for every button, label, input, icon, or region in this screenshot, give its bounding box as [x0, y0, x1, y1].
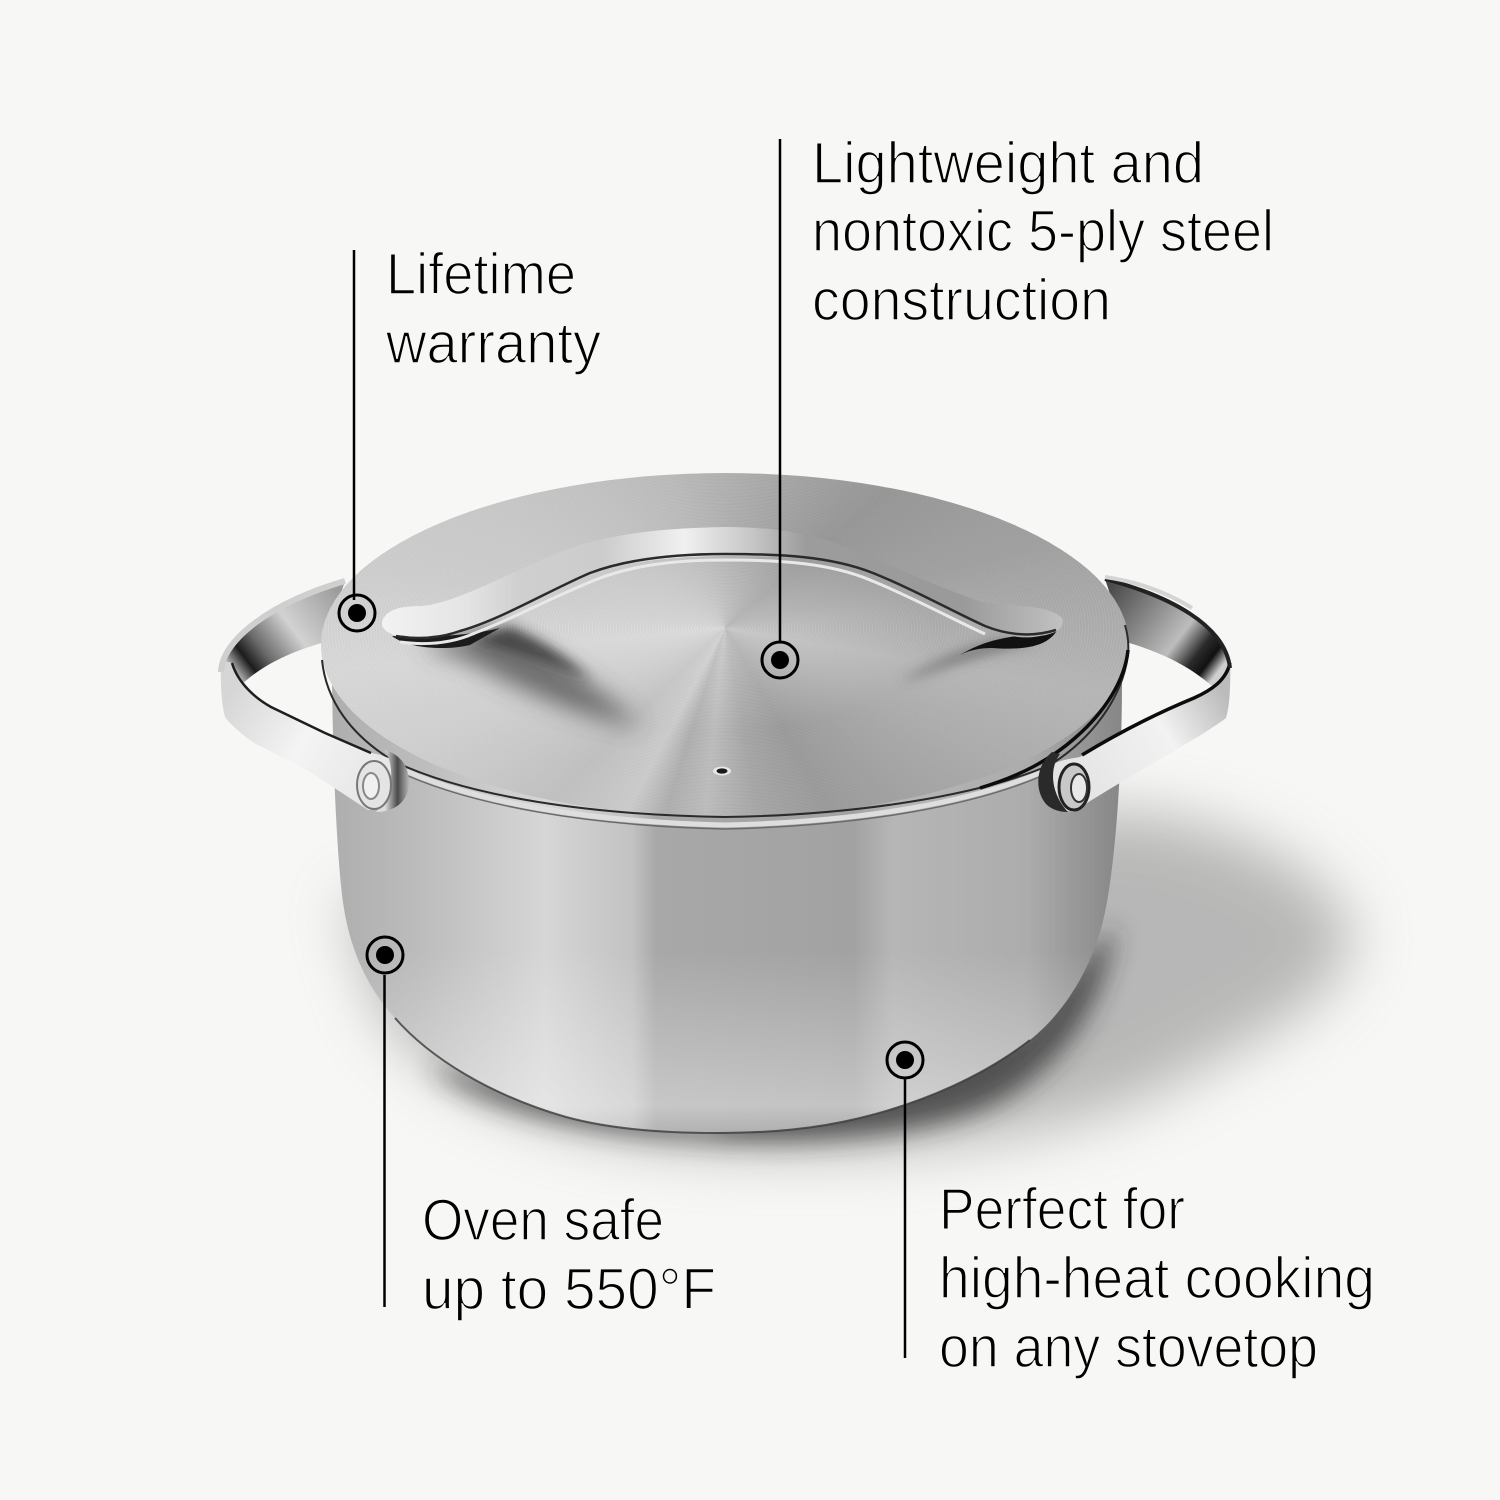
back of handles: [221, 579, 1230, 688]
pot illustration: [218, 473, 1378, 1184]
lid top surface: [321, 473, 1129, 817]
pot body: [332, 680, 1122, 1133]
callout: lightweight construction: construction: [812, 268, 1111, 333]
callout: oven safe: Oven safe: [422, 1188, 664, 1253]
callout: oven safe: [367, 937, 716, 1322]
callout: lifetime warranty: warranty: [385, 311, 601, 376]
callout: lightweight construction: Lightweight and: [812, 131, 1204, 196]
right handle front band: [1040, 577, 1230, 812]
callout: high-heat cooking: high-heat cooking: [939, 1246, 1375, 1311]
callout: lifetime warranty: Lifetime: [386, 242, 576, 307]
callout: high-heat cooking: [887, 1042, 1375, 1380]
callout: oven safe: up to 550°F: [422, 1257, 716, 1322]
callout: lifetime warranty: [339, 242, 601, 631]
callout: lightweight construction: nontoxic 5-ply steel: [812, 199, 1274, 264]
steam vent: [713, 766, 731, 776]
left rivet: [357, 750, 409, 812]
right rivet: [1038, 752, 1089, 812]
lid rim: [322, 625, 1128, 829]
callout: high-heat cooking: on any stovetop: [939, 1315, 1318, 1380]
callout: lightweight construction: [762, 131, 1274, 678]
lid handle shadow: [392, 626, 1056, 725]
cast shadow: [345, 810, 1351, 1152]
left handle front band: [221, 581, 408, 810]
callout: high-heat cooking: Perfect for: [939, 1177, 1185, 1242]
lid handle: [382, 527, 1063, 644]
